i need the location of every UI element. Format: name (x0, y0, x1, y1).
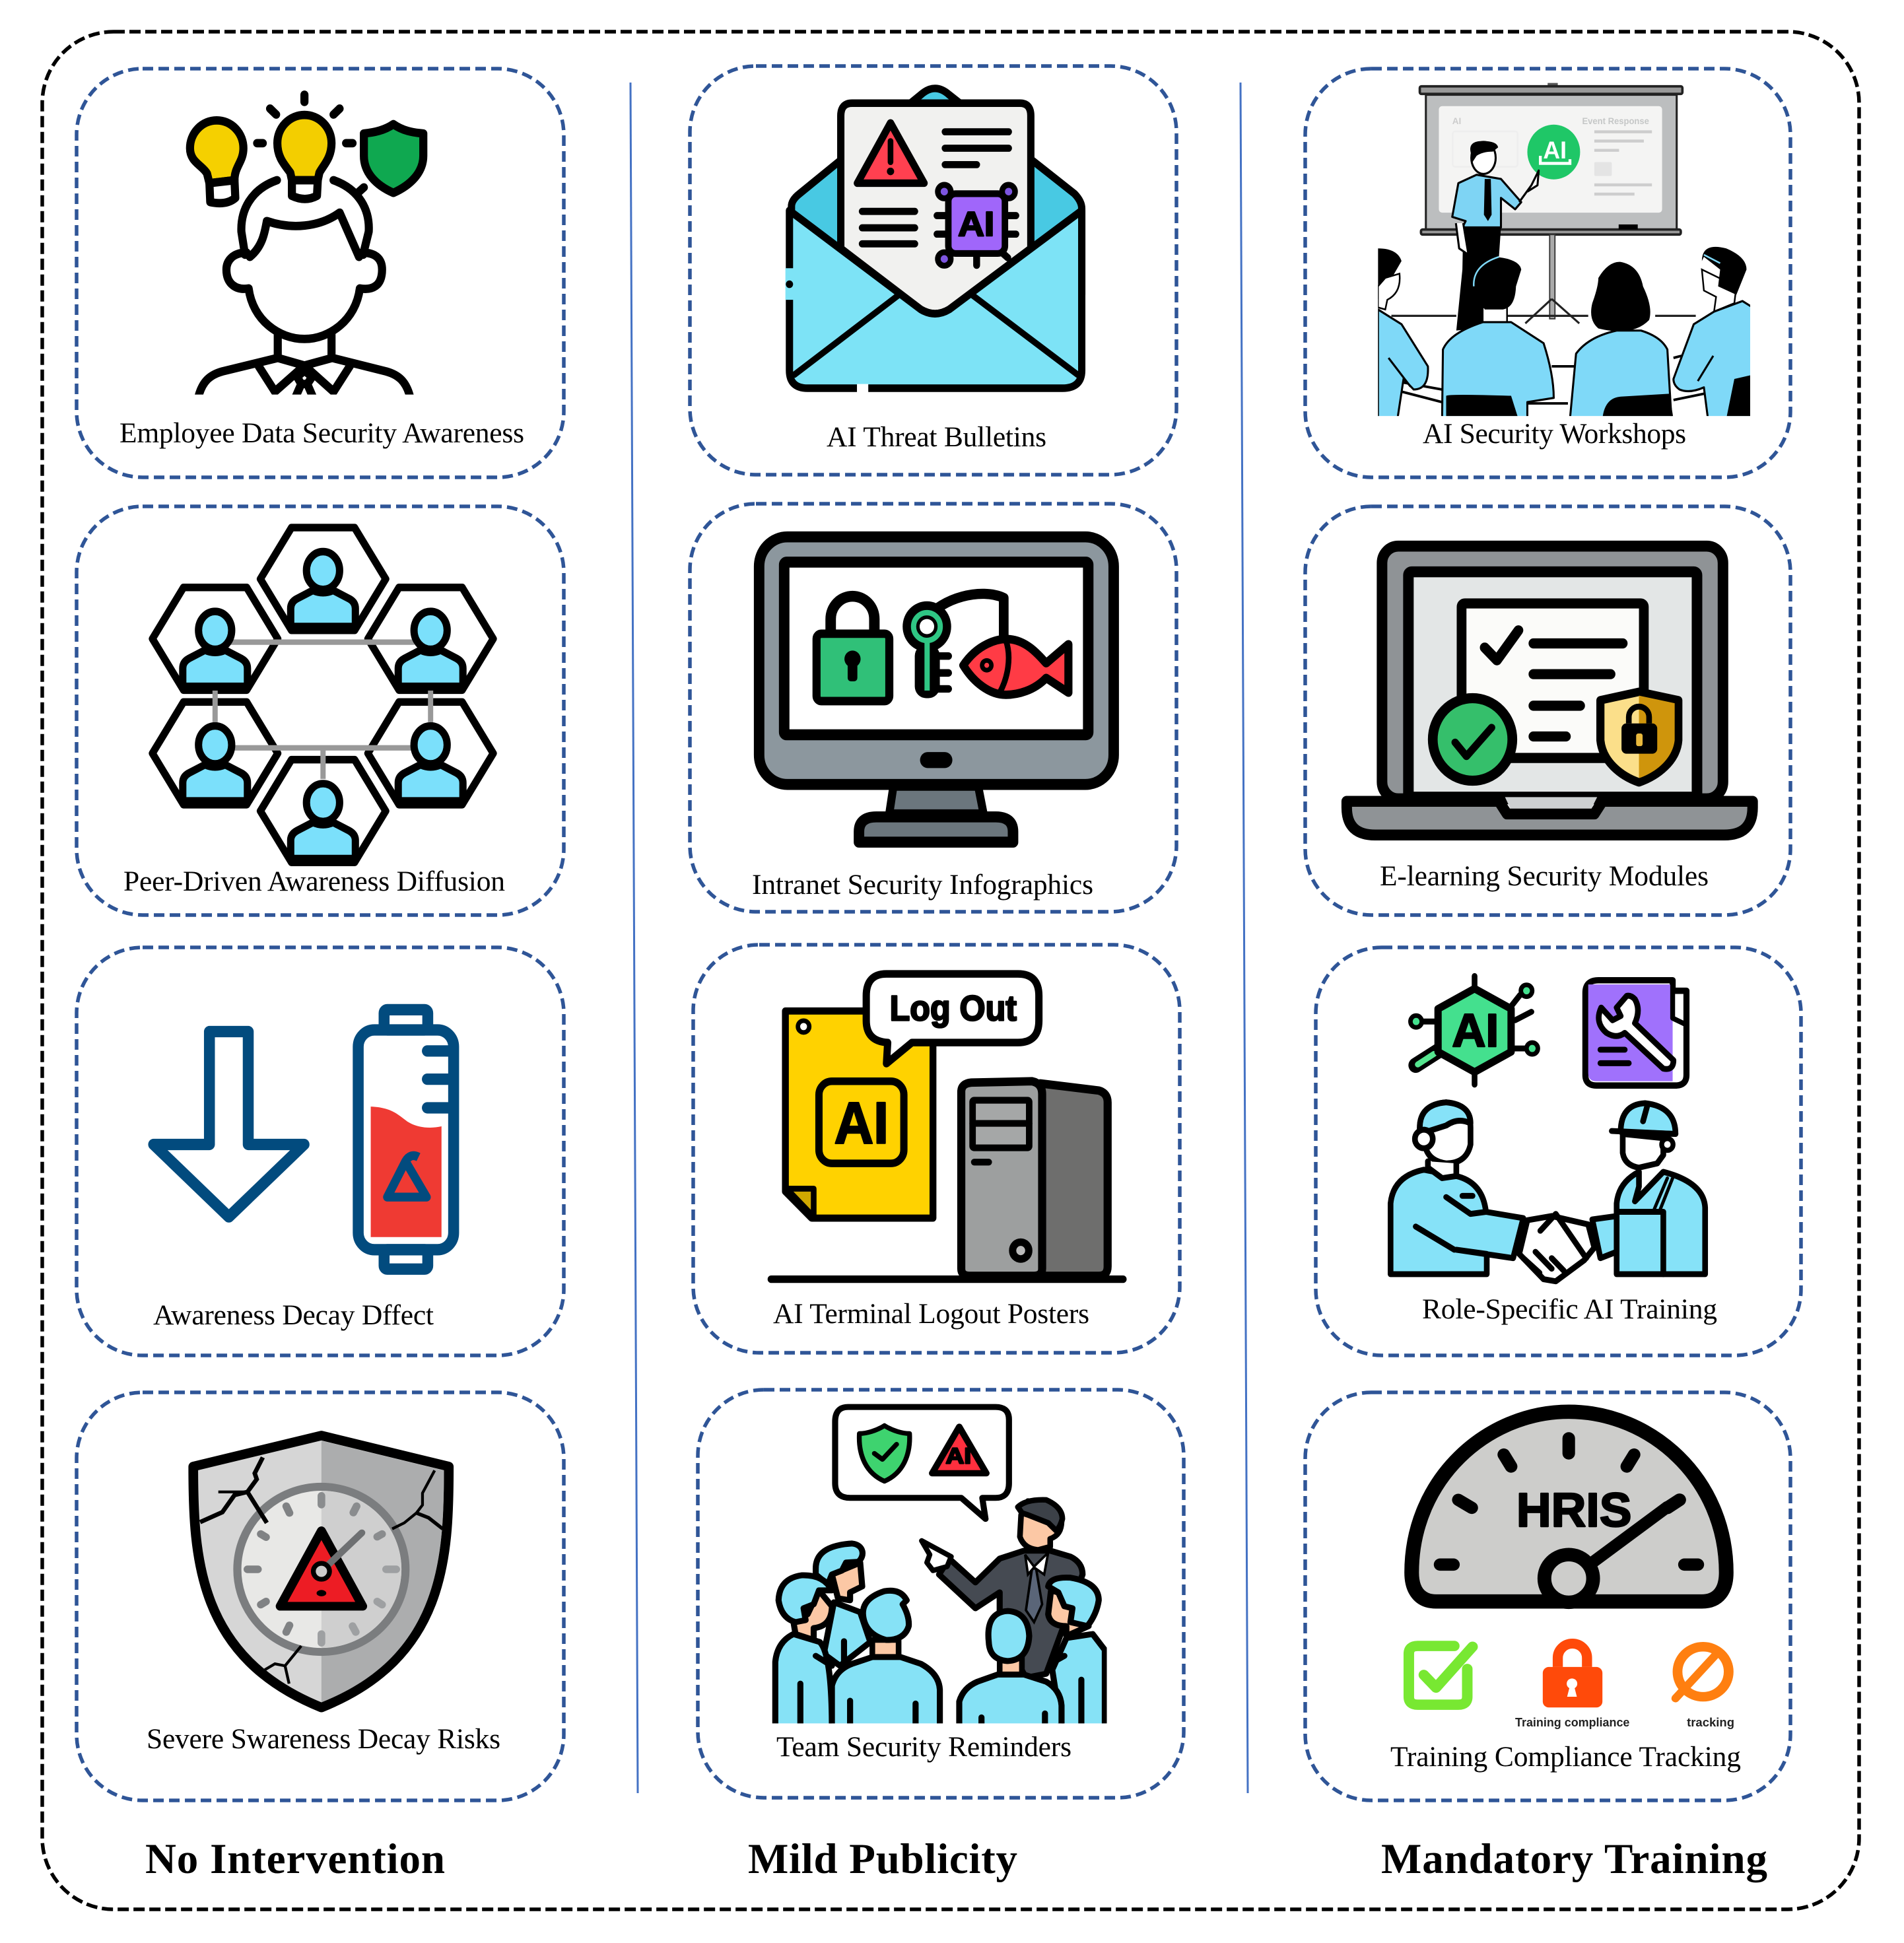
divider: column 1 and 2 (630, 83, 638, 1793)
panel: Severe Awareness Decay Risks (77, 1392, 564, 1800)
caption: AI Security Workshops (1423, 418, 1686, 450)
icon: presenter speaking to team (775, 1407, 1105, 1729)
icon: monitor with lock, key and phishing fish (759, 537, 1114, 842)
icon: workshop with presenter and audience: AI (1452, 116, 1461, 126)
caption: AI Terminal Logout Posters (773, 1298, 1089, 1330)
small label: tracking: tracking (1687, 1715, 1734, 1729)
panel: AI Threat Bulletins (690, 66, 1176, 475)
panel: Role-Specific AI Training (1316, 947, 1801, 1355)
icon: laptop with checklist and gold shield (1347, 546, 1753, 835)
panel: Intranet Security Infographics (690, 504, 1176, 912)
caption: Employee Data Security Awareness (119, 417, 524, 449)
icon: presenter speaking to team: AI (945, 1444, 971, 1468)
icon: AI hexagon, manual and handshake: AI (1452, 1005, 1499, 1056)
icon: HRIS gauge: HRIS (1516, 1484, 1631, 1537)
panel: Team Security Reminders (698, 1390, 1184, 1798)
icon: AI poster and computer tower: AI (834, 1091, 889, 1156)
icon: connected peer hexagons (153, 528, 493, 862)
caption: E-learning Security Modules (1380, 860, 1709, 892)
icon: AI hexagon, manual and handshake (1390, 976, 1705, 1281)
caption: AI Threat Bulletins (827, 421, 1046, 453)
icon: workshop with presenter and audience (1378, 83, 1753, 419)
caption: Awareness Decay Dffect (153, 1299, 434, 1331)
icon: workshop with presenter and audience: Event Response (1582, 116, 1649, 126)
icon: HRIS gauge (1409, 1412, 1734, 1729)
divider: column 2 and 3 (1241, 83, 1248, 1793)
panel: E-learning Security Modules (1305, 506, 1790, 915)
caption: Severe Swareness Decay Risks (147, 1723, 500, 1755)
heading: Mild Publicity: Mild Publicity (748, 1835, 1017, 1883)
icon: AI poster and computer tower (771, 974, 1123, 1279)
icon: down arrow and draining battery (154, 1009, 454, 1269)
panel: Employee Data Security Awareness (77, 69, 564, 477)
panel: Training Compliance Tracking (1305, 1392, 1790, 1800)
icon: AI poster and computer tower: Log Out (890, 988, 1017, 1029)
caption: Role-Specific AI Training (1422, 1293, 1717, 1325)
caption: Team Security Reminders (776, 1731, 1071, 1763)
icon: envelope with AI threat letter (786, 88, 1082, 388)
icon: workshop with presenter and audience: AI (1543, 136, 1567, 164)
icon: employee with bulbs and shield (190, 95, 423, 398)
caption: Peer-Driven Awareness Diffusion (123, 866, 505, 897)
icon: envelope with AI threat letter: AI (958, 205, 994, 243)
icon: orange lock (1543, 1643, 1602, 1707)
small label: training compliance: Training compliance (1515, 1715, 1629, 1729)
panel: Awareness Decay Effect (77, 947, 564, 1355)
panel: Peer-Driven Awareness Diffusion (77, 506, 564, 915)
heading: Mandatory Training: Mandatory Training (1381, 1835, 1767, 1883)
icon: orange ban symbol (1676, 1647, 1728, 1698)
icon: green checkbox (1409, 1646, 1472, 1705)
icon: cracked shield with warning dial (193, 1435, 449, 1707)
panel: AI Security Workshops (1305, 69, 1790, 477)
panel: AI Terminal Logout Posters (693, 945, 1180, 1353)
caption: Intranet Security Infographics (752, 869, 1093, 901)
heading: No Intervention: No Intervention (145, 1835, 445, 1883)
caption: Training Compliance Tracking (1390, 1741, 1741, 1773)
